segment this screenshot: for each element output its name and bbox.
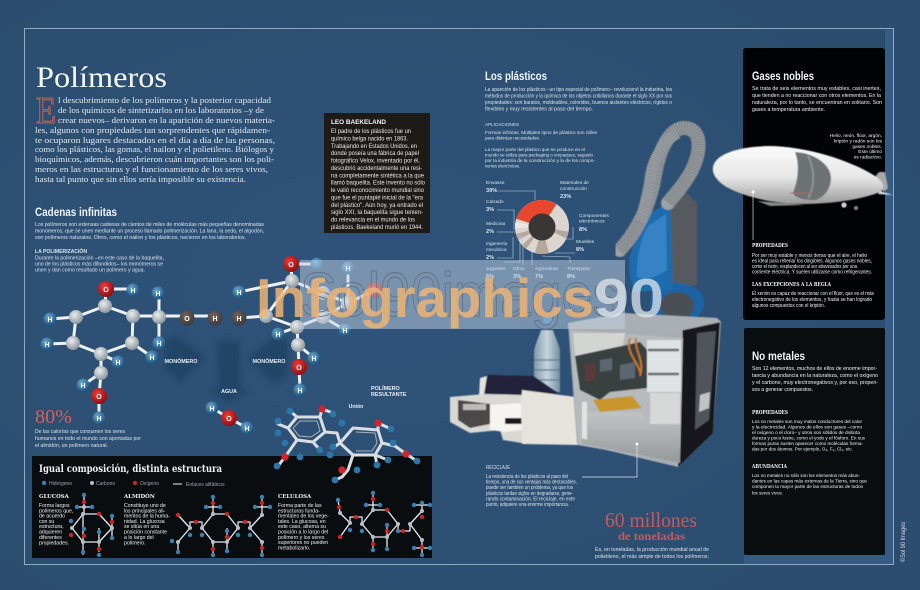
- text: propiedades: el oxígeno o el cloro– y otros son sólidos de distinta: [752, 430, 860, 436]
- text: las excepciones: electronegativo de los elementos, y hasta se han logrado: [752, 297, 872, 303]
- molecule: monomer 2: O: [288, 262, 294, 269]
- text: abundancia: [751, 464, 867, 496]
- text: almidón: nidad. La glucosa: [124, 519, 165, 525]
- chart labels: 8%: [579, 227, 587, 233]
- text: propiedades: como el neón, resplandecen al ser atravesados por una: [752, 264, 857, 270]
- chart labels: 23%: [560, 194, 571, 200]
- text: propiedades: Los no metales son muy malos conductores del calor: [752, 419, 862, 425]
- diagram: almidón: [170, 495, 272, 557]
- text: almidón: a lo largo del: [124, 535, 154, 541]
- caption: gases: es radiactivo.: [854, 154, 882, 160]
- text: 80% caption: De las calorías que consumen los seres: [35, 429, 125, 435]
- text: propiedades: es ideal para rellenar los dirigibles. Algunos gases nobles,: [752, 258, 872, 264]
- text: propiedades: PROPIEDADES: [752, 410, 788, 416]
- panel: Leo Baekeland: donde poseía una fábrica de papel: [331, 151, 419, 157]
- panel: Leo Baekeland: que fue el puntapié inicial de la "era: [331, 195, 424, 201]
- chart labels: 2%: [486, 229, 494, 235]
- text: gases nobles: que tienden a no reaccionar con otros elementos. En la: [752, 93, 881, 99]
- text: glucosa: [39, 494, 73, 546]
- intro text: l descubrimiento de los polímeros y la posterior capacidad: [58, 95, 272, 105]
- molecule: monomer 1: H: [47, 317, 53, 324]
- label: polímero resultante: [371, 384, 407, 398]
- text: almidón: mentos de la huma-: [124, 514, 170, 520]
- chart labels: mecánica: [486, 247, 507, 253]
- drop cap: E: [36, 90, 56, 132]
- text: reciclaje: puede ser también un problema, ya que los: [486, 485, 573, 491]
- image: plastic bottle: [534, 316, 560, 392]
- text: celulosa: este caso, alterna su: [278, 524, 326, 530]
- text: aplicaciones: nentes electrónicos.: [485, 164, 520, 170]
- stat: 80%: 80%: [35, 406, 72, 428]
- watermark: Sol90images: [300, 261, 620, 330]
- molecule: monomer 1: [40, 281, 222, 424]
- text: gases nobles: Se trata de seis elementos muy estables, casi inertes,: [752, 86, 881, 92]
- leader: reciclaje: [582, 443, 638, 477]
- text: aplicaciones: La mayor parte del plástico que se produce en el: [485, 147, 585, 153]
- heading: gases nobles: Gases nobles: [752, 71, 814, 83]
- chart labels: Ingeniería: [486, 241, 508, 247]
- text: propiedades: Por ser muy estable y menos denso que el aire, el helio: [752, 253, 867, 259]
- molecule: monomer 1: O: [103, 287, 109, 294]
- molecule: water: H: [209, 406, 215, 413]
- molecule: monomer 1: H: [96, 416, 102, 423]
- text: 60 millones caption: [595, 547, 709, 560]
- chart labels: Medicina: [486, 221, 506, 227]
- caption: gases: gases nobles.: [852, 144, 882, 150]
- heading: los plásticos: Los plásticos: [485, 71, 547, 83]
- text: reciclaje: tiempo, una de sus ventajas más destacables,: [486, 480, 577, 486]
- text: almidón: se sitúa en una: [124, 524, 159, 530]
- chart labels: electrónicos: [579, 218, 605, 224]
- chart labels: 8%: [576, 247, 584, 253]
- molecule: monomer 1: H: [44, 342, 50, 349]
- text: las excepciones: [752, 282, 874, 309]
- text: celulosa: [278, 494, 329, 551]
- image: airship: [713, 146, 893, 210]
- text: gases nobles: [752, 86, 882, 113]
- molecule: water: [206, 402, 254, 434]
- text: propiedades: PROPIEDADES: [752, 243, 788, 249]
- panel: Leo Baekeland: llamó baquelita. Este invento no sólo: [331, 181, 426, 187]
- molecule: monomer 2: H: [236, 316, 242, 323]
- text: glucosa: estructura,: [39, 524, 64, 530]
- text: no metales: y el carbono, muy electronegativos y, por eso, propen-: [752, 380, 878, 386]
- panel: Leo Baekeland: fotográfico Velox, inventado por él,: [331, 158, 420, 164]
- text: abundancia: ABUNDANCIA: [751, 464, 788, 470]
- chart labels: Juguetes: [486, 266, 506, 272]
- text: almidón: ALMIDÓN: [123, 492, 155, 500]
- text: glucosa: diferentes: [39, 535, 62, 541]
- text: reciclaje: RECICLAJE: [486, 465, 510, 471]
- text: glucosa: con su: [39, 519, 54, 525]
- text: 60 millones caption: polietileno, el más simple de todos los polímeros.: [595, 554, 709, 560]
- panel: Leo Baekeland: siglo XXI, la baquelita sigue tenien-: [331, 210, 423, 216]
- chart labels: Otros: [513, 266, 525, 272]
- text: almidón: polímero.: [124, 540, 146, 546]
- text: celulosa: posición a lo largo del: [278, 530, 328, 536]
- chart labels: 6%: [486, 274, 494, 280]
- text: glucosa: propiedades.: [39, 540, 69, 546]
- chart leader lines: [497, 191, 575, 265]
- text: celulosa: metabolizarlo.: [278, 545, 310, 551]
- text: celulosa: polímero y los seres: [278, 535, 325, 541]
- diagram: celulosa: [336, 491, 432, 557]
- panel: gases nobles: [743, 48, 885, 320]
- stat: 60 millones: 60 millones: [605, 508, 697, 532]
- chart labels: Agricultura: [535, 266, 558, 272]
- text: abundancia: componen la mayor parte de las estructuras de todos: [752, 484, 864, 490]
- intro text: como los plásticos, las gomas, el nailon y el polietileno. Biólogos y: [35, 144, 275, 154]
- chart labels: Envases: [486, 180, 505, 186]
- text: las excepciones: algunos compuestos con el kriptón.: [752, 303, 825, 309]
- text: celulosa: CELULOSA: [278, 494, 312, 500]
- panel: Leo Baekeland: Trabajando en Estados Unidos, en: [331, 144, 417, 150]
- chart labels: Transporte: [567, 266, 590, 272]
- watermark: Infographics: [256, 267, 594, 329]
- intro text: crear nuevos– derivaron en la aparición de nuevos materia-: [58, 115, 275, 125]
- text: no metales: tancia y abundancia en la naturaleza, como el oxígeno: [752, 373, 878, 379]
- panel: Leo Baekeland: químico belga nacido en 1863.: [331, 136, 408, 142]
- text: almidón: [123, 492, 170, 546]
- text: aplicaciones: para distintas necesidades.: [485, 136, 540, 142]
- text: cadenas infinitas: monómeros, que se unen mediante un proceso llamado polimerización. La lana, la seda, el algodón,: [35, 228, 264, 234]
- text: no metales: sos a generar compuestos.: [752, 387, 813, 393]
- text: celulosa: mentales de los vege-: [278, 514, 329, 520]
- text: los plásticos: flexibles y muy resistentes al paso del tiempo.: [485, 106, 593, 112]
- molecule: monomer 2: H: [275, 332, 281, 339]
- panel: Leo Baekeland: El padre de los plásticos fue un: [331, 129, 411, 135]
- molecule: monomer 1: O: [184, 316, 190, 323]
- text: las excepciones: LAS EXCEPCIONES A LA REGLA: [752, 282, 832, 288]
- panel: Leo Baekeland: do relevancia en el mundo de los: [331, 218, 415, 224]
- molecule: monomer 2: H: [311, 356, 317, 363]
- text: abundancia: los seres vivos.: [752, 490, 783, 496]
- caption: gases: [830, 133, 883, 160]
- molecule: monomer 2: O: [296, 365, 302, 372]
- text: la polimerización: unen y dan como resultado un polímero y agua.: [35, 268, 145, 274]
- text: propiedades: [752, 410, 866, 452]
- molecule: monomer 1: H: [212, 316, 218, 323]
- credit: ©Sol 90 Images: [899, 521, 907, 562]
- panel: Leo Baekeland: del plástico". Aún hoy, ya entrado el: [331, 203, 423, 209]
- chart labels: 7%: [535, 274, 543, 280]
- panel: Leo Baekeland: descubrió accidentalmente una resi-: [331, 166, 422, 172]
- stat: 60 millones: [605, 508, 697, 543]
- text: glucosa: GLUCOSA: [39, 494, 70, 500]
- chart labels: 2%: [486, 255, 494, 261]
- text: propiedades: corriente eléctrica. Y suelen utilizarse como refrigerantes.: [752, 270, 872, 276]
- text: glucosa: polímeros que,: [39, 508, 73, 514]
- molecule: monomer 2: H: [342, 328, 348, 335]
- text: propiedades: [752, 243, 872, 276]
- text: no metales: Son 12 elementos, muchos de ellos de enorme impor-: [752, 366, 877, 372]
- text: glucosa: Forma largos: [39, 503, 70, 509]
- molecule: monomer 1: H: [115, 360, 121, 367]
- text: gases nobles: naturaleza, por lo tanto, se encuentran en solitario. Son: [752, 100, 882, 106]
- text: propiedades: formas puras suelen aparecer como moléculas forma-: [752, 441, 863, 447]
- text: gases nobles: gases a temperatura ambiente.: [752, 107, 825, 113]
- label: agua: AGUA: [221, 389, 237, 395]
- legend: Oxígeno: [140, 481, 159, 487]
- text: 60 millones caption: Es, en toneladas, la producción mundial anual de: [595, 547, 709, 553]
- legend: Hidrógeno: [49, 481, 72, 487]
- chart labels: Componentes: [579, 213, 609, 219]
- text: los plásticos: [485, 87, 672, 112]
- text: la polimerización: [35, 247, 164, 274]
- text: 80% caption: el almidón, un polímero natural.: [35, 443, 108, 449]
- molecule: monomer 2: H: [236, 290, 242, 297]
- legend: Enlaces alifáticos: [186, 482, 225, 488]
- text: celulosa: Forma parte de las: [278, 503, 322, 509]
- intro text: hasta tal punto que sin ellos sería imposible su existencia.: [35, 174, 246, 184]
- text: las excepciones: El xenón es capaz de reaccionar con el flúor, que es el más: [752, 291, 874, 297]
- chart labels: 3%: [486, 207, 494, 213]
- leader: airship: [752, 190, 754, 240]
- chart labels: 8%: [567, 274, 575, 280]
- label: monómero 1: MONÓMERO: [165, 357, 197, 365]
- panel: Leo Baekeland: le valió reconocimiento mundial sino: [331, 188, 425, 194]
- caption: gases: kriptón y radón son los: [834, 138, 883, 144]
- text: aplicaciones: por la industria de la construcción y la de los compo-: [485, 158, 595, 164]
- molecule: water: O: [226, 416, 232, 423]
- chart labels: construcción: [560, 186, 587, 192]
- stat: 60 millones: de toneladas: [618, 529, 685, 543]
- text: los plásticos: La aparición de los plásticos –un tipo especial de polímero– revolucionó la industria, los: [485, 87, 672, 93]
- intro text: te ocuparon lugares destacados en el día a día de las personas,: [35, 135, 275, 145]
- text: no metales: [752, 366, 878, 393]
- panel: Leo Baekeland: na completamente sintética a la que: [331, 173, 425, 179]
- intro text: [35, 95, 275, 184]
- text: almidón: Constituye uno de: [124, 503, 166, 509]
- text: reciclaje: plásticos tardan siglos en degradarse, gene-: [486, 491, 573, 497]
- text: reciclaje: [486, 465, 577, 508]
- text: reciclaje: rando contaminación. El reciclaje, en este: [486, 496, 575, 502]
- molecule: resulting polymer: [274, 405, 420, 483]
- label: unión: Unión: [349, 404, 363, 410]
- text: reciclaje: La resistencia de los plásticos al paso del: [486, 474, 568, 480]
- molecule: monomer 2: H: [345, 266, 351, 273]
- text: aplicaciones: Formas infinitas. Múltiples tipos de plástico son útiles: [485, 130, 598, 136]
- text: la polimerización: Durante la polimerización –en este caso de la baquelita,: [35, 256, 164, 262]
- text: abundancia: dantes en las capas más externas de la Tierra, sino que: [752, 478, 867, 484]
- label: polímero resultante: RESULTANTE: [371, 392, 407, 398]
- chart labels: Calzado: [486, 199, 504, 205]
- text: glucosa: adquieren: [39, 530, 62, 536]
- intro text: meros en las estructuras y el funcionamiento de los seres vivos,: [35, 164, 268, 174]
- text: propiedades: dureza y poco lustre, como el yodo y el fósforo. En sus: [752, 436, 866, 442]
- panel: no metales: [744, 328, 885, 555]
- panel: igual composición: [32, 456, 432, 558]
- molecule: monomer 1: H: [149, 355, 155, 362]
- text: cadenas infinitas: son polímeros naturales. Otros, como el nailon y los plásticos, nacieron en los laboratorios.: [35, 235, 246, 241]
- panel: Leo Baekeland: plásticos. Baekeland murió en 1944.: [331, 225, 423, 231]
- caption: gases: Este último: [858, 149, 882, 155]
- text: la polimerización: LA POLIMERIZACIÓN: [35, 247, 87, 255]
- text: 80% caption: [35, 429, 141, 449]
- legend: [42, 481, 225, 488]
- molecule: monomer 2: H: [297, 388, 303, 395]
- molecule: monomer 1: O: [96, 394, 102, 401]
- legend: Carbono: [96, 481, 115, 487]
- chart: donut of plastic uses: [486, 180, 609, 280]
- label: polímero resultante: POLÍMERO: [371, 384, 400, 392]
- text: almidón: los principales ali-: [124, 508, 166, 514]
- text: propiedades: das por dos átomos. Por ejemplo, O₂, F₂, Cl₂, etc.: [752, 446, 853, 452]
- molecule: monomer 1: H: [156, 341, 162, 348]
- text: aplicaciones: [485, 122, 598, 170]
- text: aplicaciones: mundo se utiliza para packaging o empaques, seguido: [485, 152, 593, 158]
- text: almidón: posición constante: [124, 530, 167, 536]
- caption: gases: Helio, neón, flúor, argón,: [830, 133, 882, 139]
- text: cadenas infinitas: Los polímeros son extensas cadenas de cientos de miles de moléculas más pequeñas denominadas: [35, 222, 264, 228]
- watermark: 90: [594, 267, 664, 329]
- molecule: monomer 1: H: [155, 291, 161, 298]
- chart labels: [486, 180, 609, 280]
- label: monómero 2: MONÓMERO: [253, 357, 285, 365]
- chart labels: 3%: [513, 274, 521, 280]
- text: celulosa: superiores no pueden: [278, 540, 328, 546]
- text: los plásticos: propiedades: son baratos, moldeables, coloridos, buenos aislantes eléctricos, rígidos o: [485, 100, 672, 106]
- text: glucosa: de acuerdo: [39, 514, 65, 520]
- right margin tint: [744, 30, 893, 564]
- text: celulosa: estructuras funda-: [278, 508, 320, 514]
- chart labels: 39%: [486, 188, 497, 194]
- reaction arrows: [165, 336, 288, 403]
- text: 80% caption: humanos en todo el mundo son aportadas por: [35, 436, 141, 442]
- molecule: water: H: [244, 426, 250, 433]
- chart labels: Materiales de: [560, 180, 589, 186]
- intro text: bioquímicos, además, descubrieron cuán importantes son los poli-: [35, 154, 274, 164]
- text: reciclaje: punto, adquiere una enorme importancia.: [486, 502, 569, 508]
- image: printer: [450, 375, 578, 445]
- molecule: monomer 1: H: [80, 383, 86, 390]
- panel: Leo Baekeland: LEO BAEKELAND: [331, 119, 387, 126]
- heading: Cadenas infinitas: Cadenas infinitas: [35, 207, 117, 219]
- heading: no metales: No metales: [752, 351, 805, 363]
- text: cadenas infinitas: [35, 222, 264, 241]
- molecule: monomer 2: [232, 256, 383, 396]
- text: la polimerización: uno de los plásticos más difundidos– los monómeros se: [35, 262, 163, 268]
- molecule: monomer 1: H: [130, 288, 136, 295]
- text: propiedades: y la electricidad. Algunos de ellos son gases –como: [752, 424, 862, 430]
- text: aplicaciones: APLICACIONES: [485, 122, 519, 128]
- title: Polímeros: [36, 61, 167, 94]
- chart labels: Muebles: [576, 239, 595, 245]
- text: los plásticos: métodos de producción y la química de los objetos cotidianos durante el siglo XX por sus: [485, 94, 672, 100]
- image: vacuum cleaner: [620, 128, 704, 323]
- image: computer tower: [568, 313, 721, 467]
- intro text: de los químicos de sintetizarlos en los laboratorios –y de: [58, 105, 264, 115]
- heading: igual composición: Igual composición, distinta estructura: [39, 463, 222, 475]
- text: abundancia: Los no metales no sólo son los elementos más abun-: [752, 473, 860, 479]
- text: celulosa: tales. La glucosa, en: [278, 519, 326, 525]
- intro text: les, algunos con propiedades tan sorprendentes que rápidamen-: [35, 125, 270, 135]
- diagram: glucosa: [69, 493, 114, 557]
- panel: Leo Baekeland: [324, 113, 430, 233]
